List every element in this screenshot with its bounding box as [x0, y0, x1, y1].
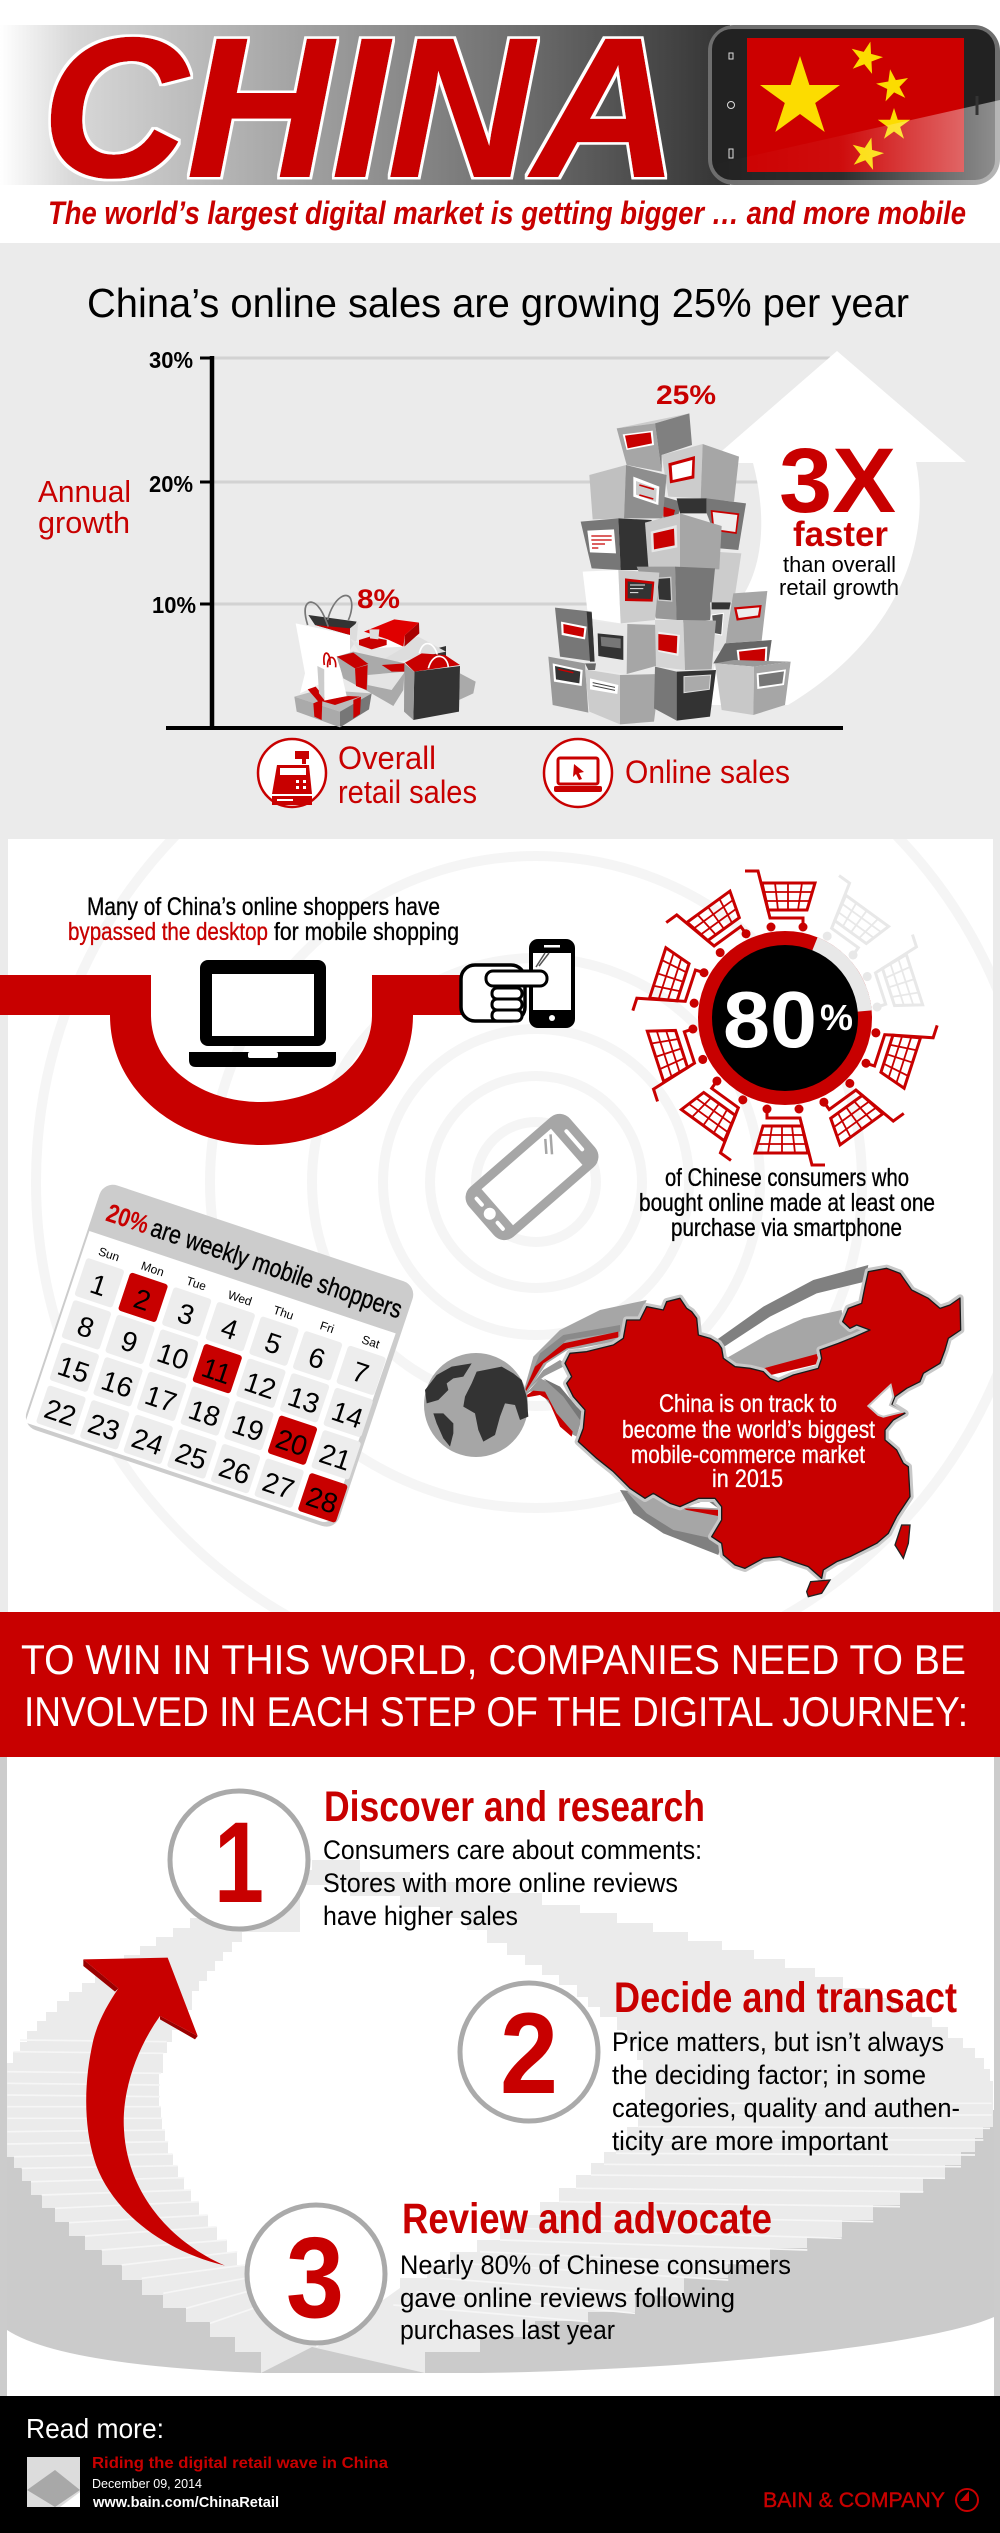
title: CHINA: CHINA — [42, 0, 678, 218]
y-axis title: annual growth — [38, 474, 131, 540]
icon: cash register — [272, 751, 312, 805]
graphic: 80% cart ring — [633, 871, 937, 1165]
text: 80% description: bought online made at least one — [639, 1189, 935, 1217]
panel: online sales growth — [0, 243, 1000, 839]
step 2: the deciding factor; in some — [612, 2060, 926, 2090]
legend: overall retail sales: Overall — [338, 740, 436, 776]
step 3 number circle: 3 — [286, 2214, 344, 2342]
step 1 — [170, 1783, 705, 1931]
bar chart axes and gridlines — [166, 356, 843, 728]
date numbers: 15 — [54, 1350, 93, 1389]
map ribbons from globe to China — [522, 1265, 868, 1555]
link: article: www.bain.com/ChinaRetail — [92, 2494, 279, 2511]
heading: read more: Read more: — [26, 2413, 164, 2444]
date numbers: 8 — [73, 1310, 98, 1344]
arrow: red curved — [83, 1958, 225, 2266]
weekday labels: Sat — [360, 1332, 382, 1352]
date numbers: 17 — [141, 1379, 181, 1418]
legend: online sales: Online sales — [625, 754, 790, 790]
text on map: in 2015 — [712, 1465, 783, 1493]
callout: 3X faster: faster — [793, 515, 888, 554]
date numbers: 5 — [261, 1326, 285, 1361]
weekday labels: Wed — [226, 1288, 254, 1309]
step 2: categories, quality and authen- — [612, 2093, 960, 2123]
date numbers: 11 — [198, 1352, 235, 1390]
step 2 number circle: 2 — [500, 1990, 558, 2118]
date numbers: 7 — [348, 1356, 373, 1390]
logo: Bain & Company: BAIN & COMPANY — [763, 2489, 945, 2512]
date numbers: 6 — [304, 1341, 329, 1375]
step 3 number circle — [247, 2205, 385, 2343]
date numbers: 12 — [240, 1366, 280, 1405]
y-axis tick labels: 20% — [149, 471, 193, 497]
legend: online sales — [544, 739, 790, 807]
step 1: Consumers care about comments: — [323, 1835, 702, 1865]
step 2 number circle — [460, 1983, 598, 2121]
legend: overall retail sales — [258, 739, 477, 810]
date numbers: 26 — [215, 1451, 254, 1491]
date numbers: 10 — [153, 1337, 193, 1376]
step 3: Review and advocate — [402, 2195, 772, 2243]
link: article — [92, 2455, 388, 2511]
date numbers: 21 — [316, 1438, 355, 1477]
legend: overall retail sales: retail sales — [338, 774, 477, 810]
weekday labels: Thu — [271, 1303, 295, 1323]
big white arrow — [700, 351, 966, 705]
text on map: mobile-commerce market — [631, 1441, 865, 1469]
text: bypassed the desktop: for mobile shopping — [274, 918, 459, 946]
calendar header: are weekly mobile shoppers — [147, 1212, 406, 1324]
y-axis tick labels — [149, 347, 196, 618]
weekday labels: Mon — [139, 1259, 166, 1279]
header band — [0, 0, 730, 218]
step 3: gave online reviews following — [400, 2283, 735, 2313]
date numbers: 28 — [302, 1481, 342, 1520]
y-axis title: annual growth: Annual — [38, 474, 131, 509]
panel: journey staircase — [0, 1757, 1000, 2396]
icon: ring of shopping carts — [633, 871, 937, 1165]
banner: digital journey — [0, 1612, 1000, 1757]
step 1: Stores with more online reviews — [323, 1868, 678, 1898]
date numbers: 14 — [328, 1395, 367, 1434]
callout: 3X faster: retail growth — [779, 575, 899, 600]
date numbers: 1 — [86, 1268, 111, 1302]
icon: smartphone with Chinese flag — [708, 25, 1000, 185]
date numbers: 20 — [272, 1423, 311, 1462]
y-axis tick labels: 30% — [149, 347, 193, 373]
step 2 — [460, 1974, 960, 2156]
graphic: 80% cart ring: 80 — [723, 975, 817, 1064]
step 1 number circle: 1 — [214, 1799, 264, 1927]
date numbers: 16 — [98, 1365, 137, 1404]
heading: online sales: China’s online sales are growing 25% per year — [87, 280, 909, 326]
text: bypassed the desktop — [68, 893, 459, 946]
date numbers: 25 — [171, 1437, 211, 1476]
text: 80% description: purchase via smartphone — [671, 1214, 902, 1242]
text: 80% description — [639, 1164, 935, 1242]
date numbers: 9 — [117, 1325, 142, 1359]
map of China — [565, 1268, 961, 1597]
bar: stack of online parcels — [548, 413, 791, 724]
step 3: Nearly 80% of Chinese consumers — [400, 2250, 791, 2280]
step 1: have higher sales — [323, 1901, 518, 1931]
icon: laptop with cursor — [554, 758, 602, 792]
callout: 3X faster: 3X — [779, 430, 896, 532]
text: bypassed the desktop: Many of China’s online shoppers have — [87, 893, 440, 921]
date numbers: 2 — [130, 1283, 155, 1317]
footer — [0, 2396, 1000, 2533]
date numbers: 3 — [174, 1297, 198, 1332]
step 1 number circle — [170, 1791, 308, 1929]
date numbers: 27 — [259, 1466, 298, 1505]
calendar header — [103, 1197, 406, 1324]
panel: mobile shopping — [0, 839, 1000, 1612]
value label: 25%: 25% — [656, 380, 716, 410]
weekday labels: Tue — [184, 1274, 208, 1294]
icon: laptop — [189, 960, 336, 1067]
date numbers: 4 — [217, 1312, 242, 1346]
text: 80% description: of Chinese consumers who — [665, 1164, 909, 1192]
callout: 3X faster: than overall — [783, 552, 896, 577]
text on map: China is on track to — [659, 1390, 837, 1418]
value label: 8%: 8% — [357, 584, 400, 614]
calendar header: 20% — [103, 1197, 153, 1240]
date numbers: 19 — [228, 1408, 268, 1448]
text: bypassed the desktop: bypassed the desktop — [68, 918, 268, 946]
link: article: December 09, 2014 — [92, 2476, 202, 2491]
step 3 — [247, 2195, 791, 2345]
y-axis title: annual growth: growth — [38, 505, 130, 540]
weekday labels: Sun — [97, 1244, 121, 1264]
text on map: become the world’s biggest — [622, 1416, 875, 1444]
date numbers: 22 — [41, 1393, 80, 1432]
graphic: 80% cart ring: % — [820, 997, 853, 1038]
icon: grey smartphone — [460, 1108, 604, 1246]
calendar — [22, 1181, 417, 1530]
thumbnail: keyboard — [27, 2457, 80, 2507]
link: article: Riding the digital retail wave in China — [92, 2455, 388, 2472]
date numbers: 13 — [284, 1381, 323, 1420]
weekday labels: Fri — [318, 1318, 336, 1336]
date numbers: 24 — [128, 1422, 167, 1461]
date cells — [32, 1258, 390, 1523]
icon: globe — [424, 1353, 528, 1457]
date numbers: 23 — [84, 1408, 124, 1447]
weekday labels — [97, 1244, 382, 1352]
callout: 3X faster — [779, 430, 899, 600]
date numbers — [40, 1267, 384, 1520]
step 3: purchases last year — [400, 2315, 615, 2345]
red U-shaped path around laptop — [0, 975, 462, 1145]
step 2: ticity are more important — [612, 2126, 888, 2156]
bar: pile of shopping bags and gifts — [294, 595, 476, 727]
step 2: Price matters, but isn’t always — [612, 2027, 944, 2057]
text on map — [622, 1390, 875, 1493]
y-axis tick labels: 10% — [152, 592, 196, 618]
icon: phone and pointing hand — [461, 939, 575, 1028]
step 1: Discover and research — [324, 1783, 705, 1831]
date numbers: 18 — [185, 1394, 224, 1433]
